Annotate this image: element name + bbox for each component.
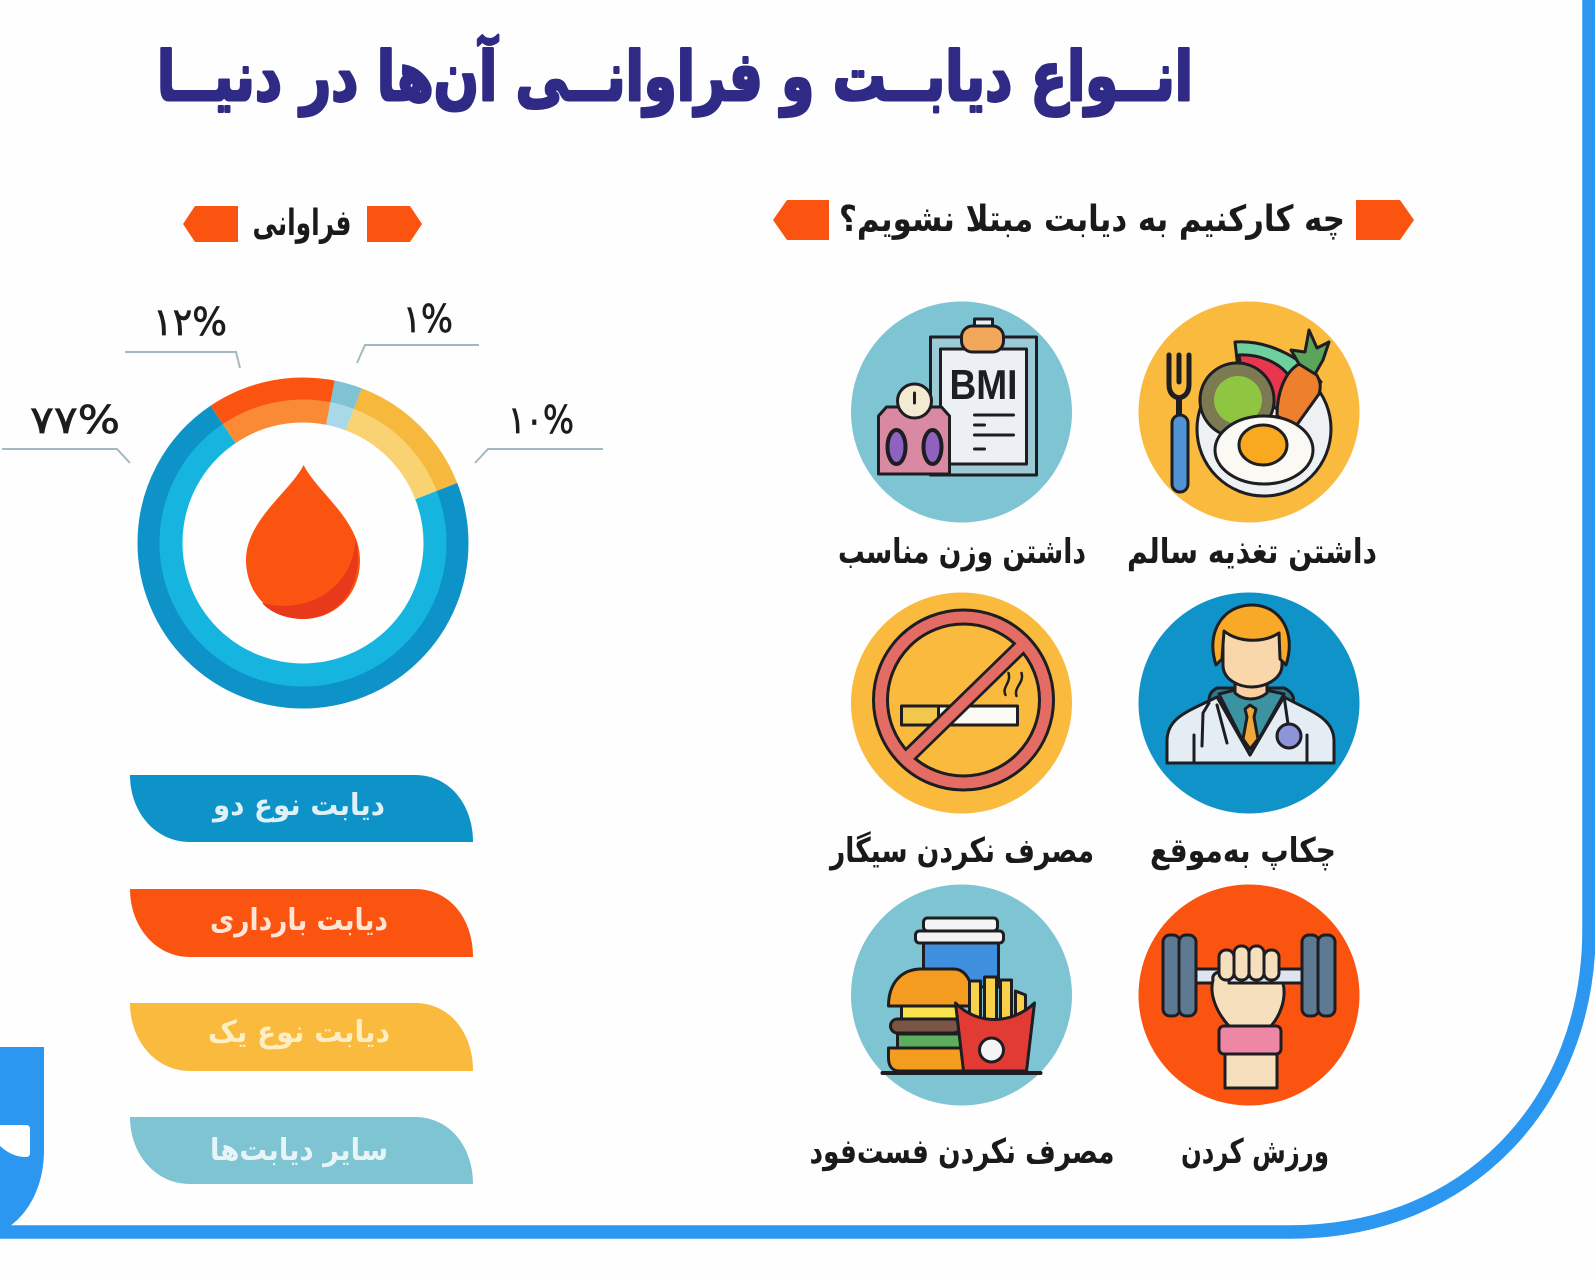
callout: 12%: ۱۲% (153, 300, 227, 344)
heading: prevention: چه کارکنیم به دیابت مبتلا نشویم؟ (839, 199, 1345, 240)
legend: others: سایر دیابت‌ها (210, 1133, 388, 1168)
legend: gestational: دیابت بارداری (210, 903, 388, 938)
label: healthy food: داشتن تغذیه سالم (1127, 532, 1377, 572)
icon: blood drop (246, 465, 360, 619)
label: no smoking: مصرف نکردن سیگار (828, 831, 1094, 871)
heading: frequency: فراوانی (252, 203, 352, 244)
callout: 1% (357, 297, 479, 363)
legend: gestational (130, 889, 473, 957)
callout: 77%: ۷۷% (30, 398, 120, 442)
callout: 10% (475, 398, 603, 463)
heading: frequency (183, 203, 422, 244)
icon: BMI: BMI (950, 361, 1018, 408)
donut chart (149, 389, 457, 697)
callout: 77% (2, 398, 130, 463)
legend: type 1 (130, 1003, 473, 1071)
icon: no smoking (851, 592, 1072, 814)
legend: others (130, 1117, 473, 1184)
icon: dumbbell (1138, 884, 1360, 1106)
callout: 10%: ۱۰% (508, 398, 574, 442)
icon: fast food (851, 884, 1072, 1106)
legend: type 2 (130, 775, 473, 842)
callout: 12% (125, 300, 240, 368)
icon: doctor (1138, 592, 1360, 814)
legend: type 1: دیابت نوع یک (208, 1015, 390, 1050)
label: checkup: چکاپ به‌موقع (1150, 831, 1336, 871)
label: no fast food: مصرف نکردن فست‌فود (810, 1132, 1114, 1172)
title: انــواع دیابــت و فراوانــی آن‌ها در دنیــا (157, 34, 1193, 117)
logo corner badge (0, 1047, 44, 1232)
label: healthy weight: داشتن وزن مناسب (838, 532, 1086, 572)
label: exercise: ورزش کردن (1181, 1132, 1329, 1172)
legend: type 2: دیابت نوع دو (211, 788, 385, 823)
callout: 1%: ۱% (403, 297, 453, 341)
icon: healthy food (1138, 302, 1360, 522)
icon: BMI (851, 302, 1072, 522)
